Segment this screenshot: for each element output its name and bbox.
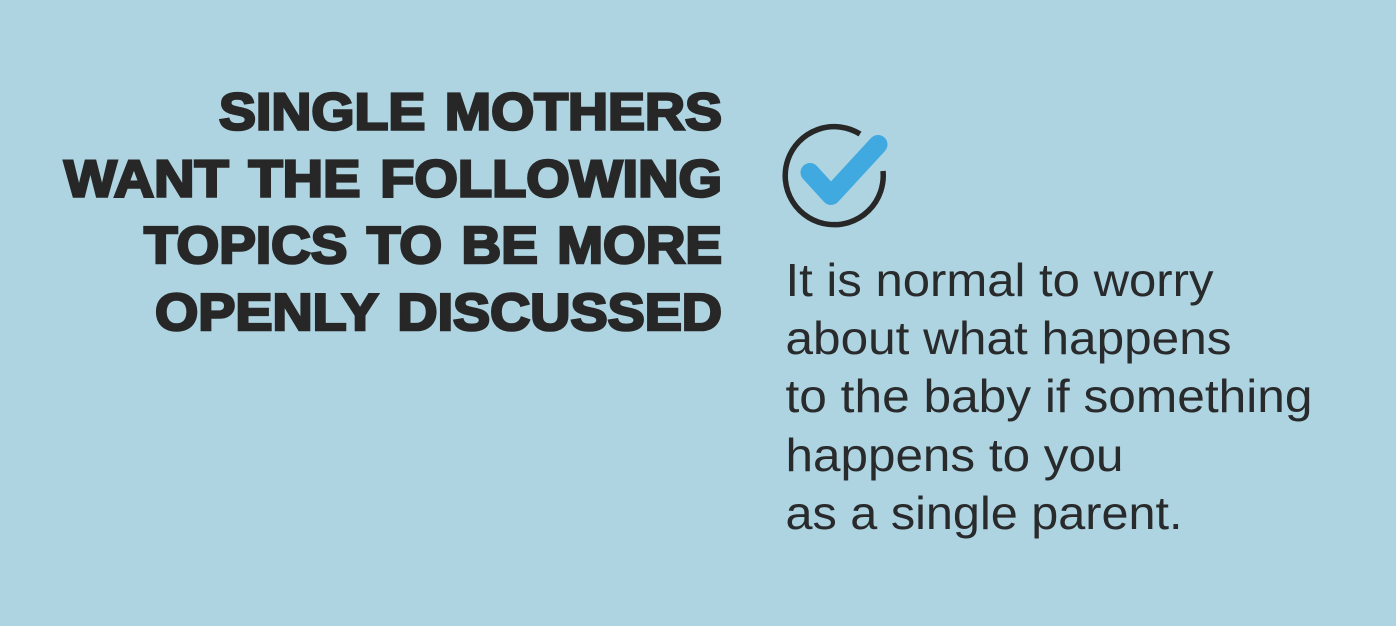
heading: OPENLY DISCUSSED [155, 284, 722, 342]
body text: happens to you [786, 429, 1124, 481]
body text: to the baby if something [786, 370, 1312, 422]
heading: SINGLE MOTHERS [219, 84, 722, 142]
heading [64, 84, 722, 342]
body text: as a single parent. [786, 487, 1182, 539]
heading: WANT THE FOLLOWING [64, 150, 722, 208]
body text [786, 254, 1312, 539]
heading: TOPICS TO BE MORE [144, 217, 722, 275]
icon: check mark in circle [785, 127, 883, 225]
body text: about what happens [786, 312, 1232, 364]
body text: It is normal to worry [786, 254, 1214, 306]
